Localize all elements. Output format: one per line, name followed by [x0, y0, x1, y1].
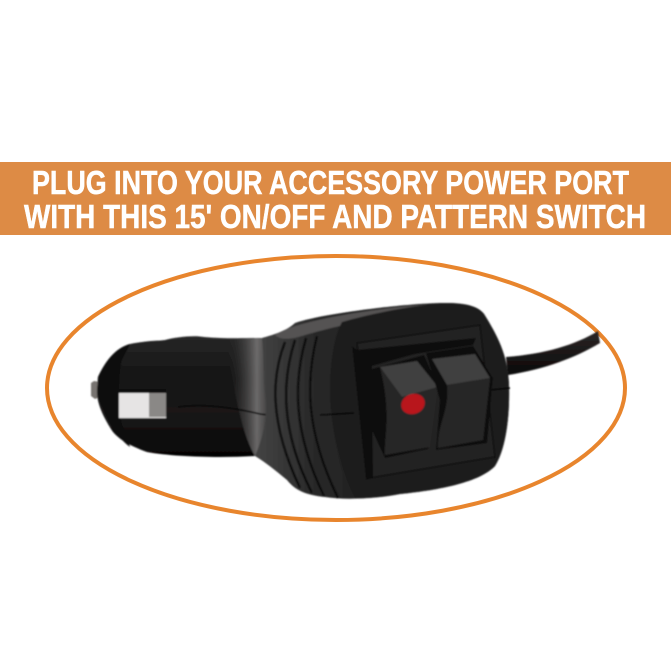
- barrel neck highlight: [225, 338, 278, 456]
- housing seam: [320, 388, 510, 415]
- switch panel: [357, 325, 495, 478]
- red indicator LED: [398, 390, 428, 418]
- left rocker lower face: [380, 367, 438, 455]
- right rocker lower face: [438, 378, 490, 448]
- orange ellipse callout: [47, 256, 625, 520]
- left rocker top face: [380, 361, 438, 397]
- ribbed housing: [255, 303, 509, 499]
- plug tip: [91, 381, 100, 399]
- right rocker recess: [426, 346, 493, 450]
- banner: [0, 162, 671, 235]
- left rocker shadow: [368, 355, 438, 458]
- housing front face: [330, 303, 509, 498]
- plug barrel: [97, 336, 290, 457]
- seam line on barrel: [178, 406, 320, 416]
- right rocker top face: [432, 354, 490, 385]
- panel recess shadow: [352, 338, 476, 480]
- cord: [506, 331, 600, 375]
- housing top highlight: [275, 304, 440, 339]
- metal side contact: [119, 389, 166, 418]
- power plug photo illustration: [91, 303, 600, 499]
- left rocker switch: [368, 355, 438, 458]
- plug nose ring: [97, 344, 130, 447]
- ribs: [275, 336, 338, 498]
- right rocker switch: [426, 346, 493, 450]
